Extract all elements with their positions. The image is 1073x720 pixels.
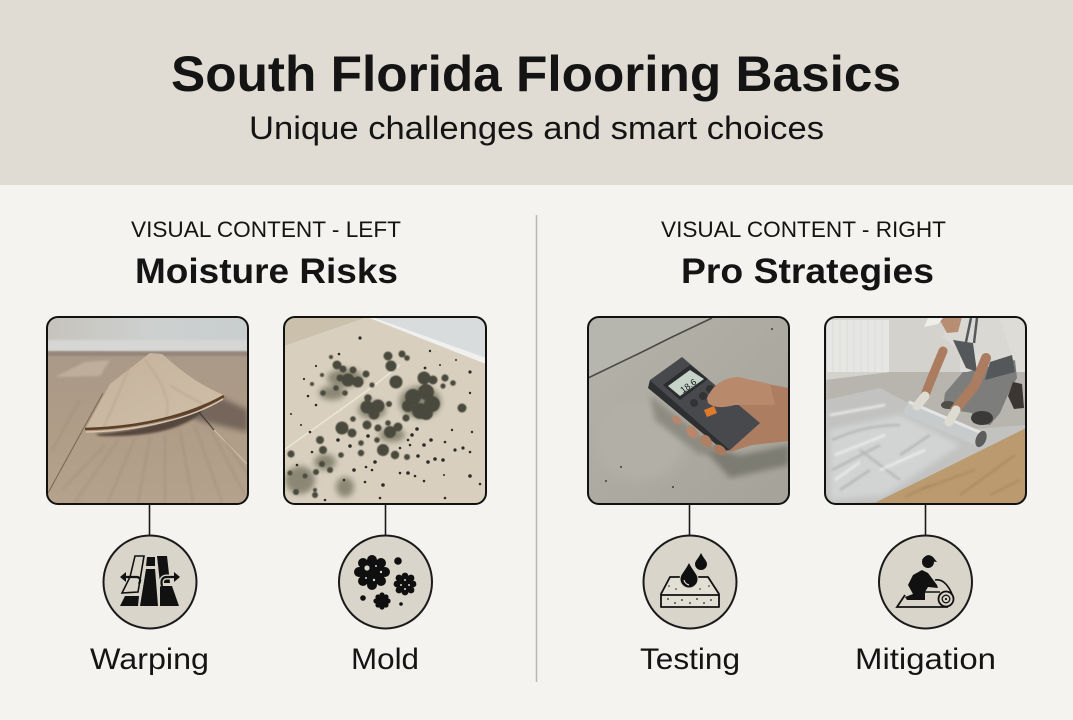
subtitle: Unique challenges and smart choices [249,110,824,146]
photo: moisture meter on concrete [588,317,789,504]
panel: moisture risks [47,217,486,676]
title: South Florida Flooring Basics [171,46,901,102]
connector: mold [384,504,386,536]
icon: moisture testing [644,536,736,628]
left eyebrow: VISUAL CONTENT - LEFT [131,217,401,242]
label: warping: Warping [90,643,209,676]
photo: worker rolling vapor barrier [825,317,1026,504]
photo: mold on floor [284,317,486,504]
panel: pro strategies [588,217,1026,676]
photo: warped plank [47,317,248,504]
connector: mitigation [924,504,926,536]
right eyebrow: VISUAL CONTENT - RIGHT [661,217,946,242]
icon: warping floorboards [104,536,196,628]
right heading: Pro Strategies [681,252,934,291]
photo: moisture meter on concrete: 18.6 [678,377,698,395]
connector: warping [148,504,150,536]
icon: mitigation installer [879,536,972,628]
left heading: Moisture Risks [135,252,398,291]
header band [0,0,1073,185]
icon: mold spores [339,536,432,628]
label: testing: Testing [640,643,740,676]
label: mitigation: Mitigation [855,643,996,676]
label: mold: Mold [351,643,419,676]
connector: testing [688,504,690,536]
